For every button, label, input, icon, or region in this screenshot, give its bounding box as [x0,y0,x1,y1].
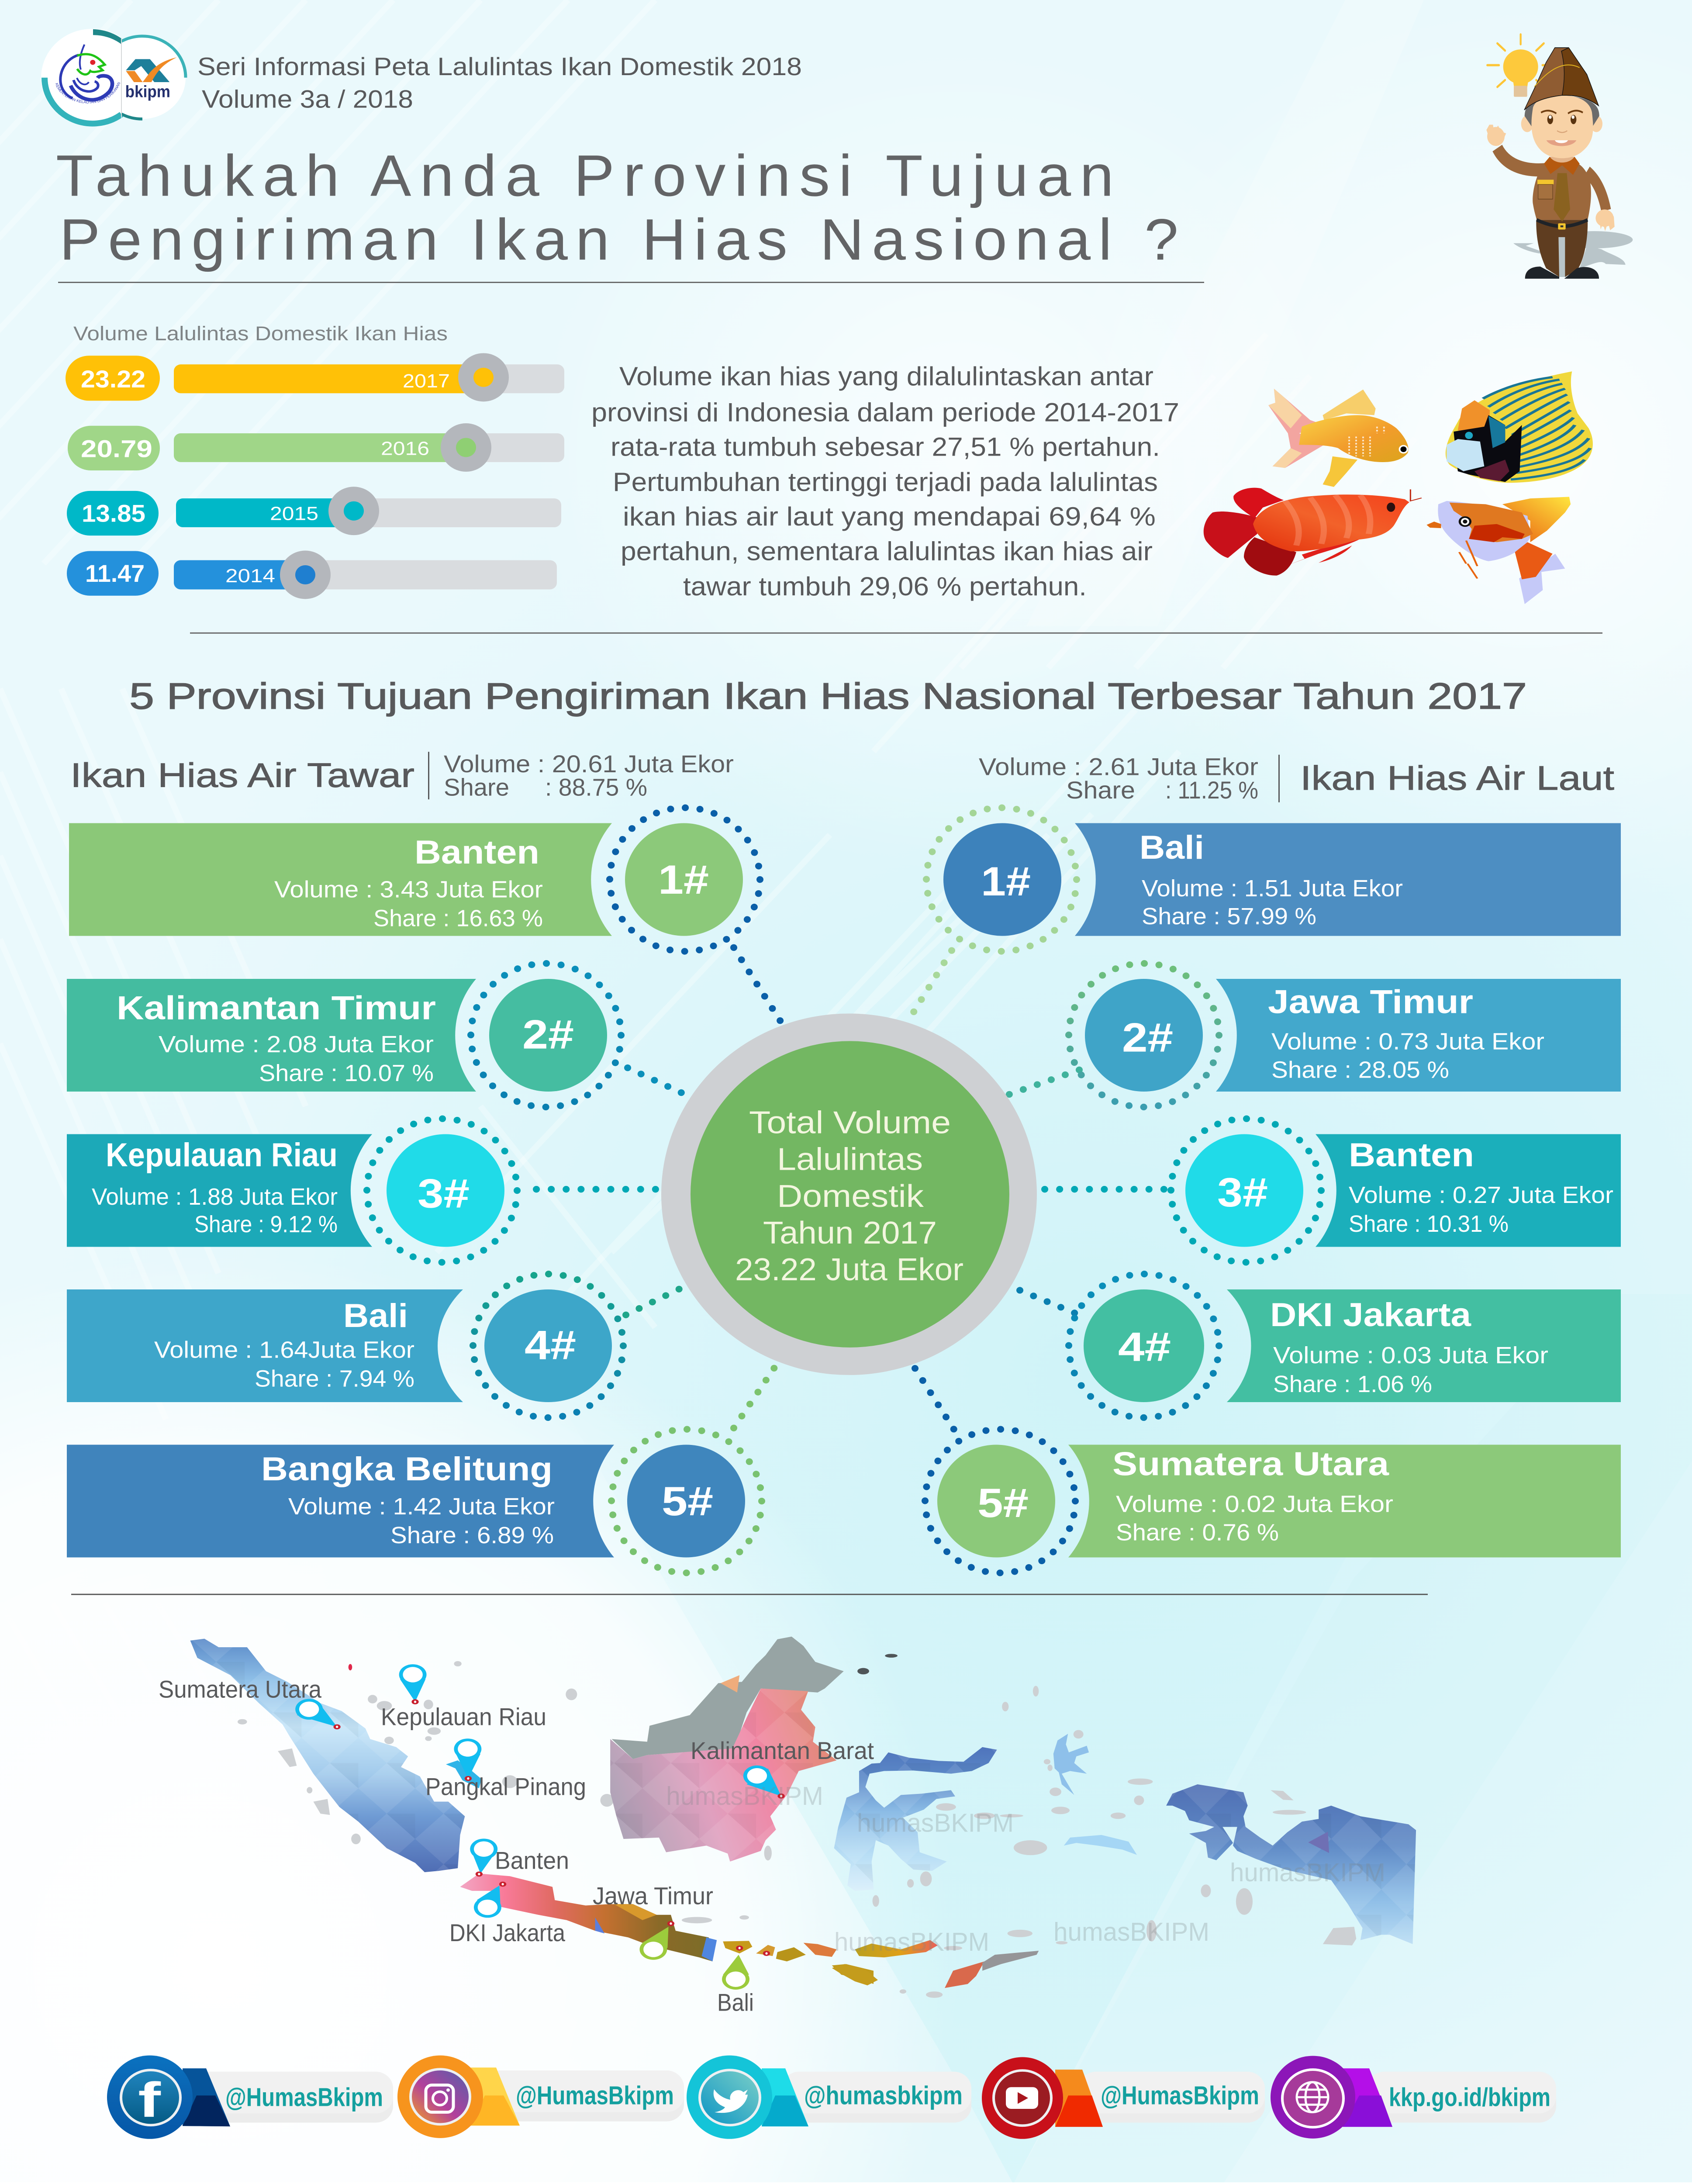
social: website: kkp.go.id/bkipm [1389,2083,1550,2111]
panel: right 4 DKI Jakarta: Share : 1.06 % [1273,1371,1432,1397]
panel: right 1 Bali: Share : 57.99 % [1142,903,1316,930]
marine summary [979,754,1614,804]
grey islands east [873,1686,1356,1998]
map labels: Sumatera Utara [159,1676,321,1703]
panel: right 1 Bali: Volume : 1.51 Juta Ekor [1142,875,1403,902]
Flores and Sumba [855,1940,938,1957]
Bali and Nusa Tenggara west [723,1941,874,1984]
map labels: Jawa Timur [593,1883,713,1910]
panel: right 2 Jawa Timur: Volume : 0.73 Juta Ekor [1271,1028,1544,1054]
panel: left 4 Bali: Bali [343,1297,408,1334]
map of Indonesia [159,1637,1416,2016]
freshwater summary: Share [444,774,509,801]
paragraph: pertahun, sementara lalulintas ikan hias air [621,537,1153,566]
paragraph: Pertumbuhan tertinggi terjadi pada lalulintas [613,467,1158,497]
header text: Seri Informasi Peta Lalulintas Ikan Domestik 2018 [197,53,802,81]
social: youtube [982,2057,1265,2139]
Papua [1166,1784,1416,1944]
bar chart: volume per year [66,353,564,599]
social: instagram: @HumasBkipm [516,2081,674,2110]
dotted connectors [536,947,1171,1431]
social: facebook [107,2056,393,2139]
logos: bkipm [125,83,170,101]
map pins [295,1664,784,1990]
watermarks: humasBKIPM [857,1808,1014,1837]
legs [1536,220,1588,277]
paragraph: Volume ikan hias yang dilalulintaskan antar [619,362,1153,391]
social: facebook: f [138,2073,161,2128]
freshwater summary [70,751,734,801]
social: youtube: @HumasBkipm [1101,2081,1259,2110]
bar 2015: 2015 [270,503,318,525]
map labels: Bali [717,1990,754,2016]
bulb [1487,35,1554,97]
center total circle: Tahun 2017 [763,1215,937,1251]
center total circle: Domestik [777,1178,924,1213]
hat [1524,48,1599,110]
marine summary: : 11.25 % [1165,777,1258,804]
map east: Sulawesi, Maluku, Papua [832,1654,1416,1998]
koi [1426,497,1571,604]
title [56,143,1178,273]
panel: right 2 Jawa Timur: Share : 28.05 % [1271,1057,1449,1083]
bar 2014 [67,551,557,599]
panel: left 4 Bali: Share : 7.94 % [255,1365,414,1392]
map labels: Pangkal Pinang [425,1773,586,1800]
header text: Volume 3a / 2018 [202,86,413,113]
panel: left 5 Bangka Belitung: Bangka Belitung [261,1450,552,1487]
panel: left 4 Bali [67,1274,623,1417]
Seram [1064,1835,1137,1855]
panel: right 1 Bali: 1# [981,859,1031,904]
panel: left 3 Kepulauan Riau: 3# [418,1171,470,1216]
logos: KEMENTERIAN KELAUTAN DAN PERIKANAN [55,82,121,104]
panel: left 5 Bangka Belitung: 5# [662,1479,713,1524]
bar 2015: 13.85 [82,501,145,527]
panel: left 1 Banten: Volume : 3.43 Juta Ekor [274,876,543,902]
panel: left 2 Kalimantan Timur: Share : 10.07 % [259,1060,434,1086]
social: twitter: @humasbkipm [804,2081,963,2110]
panel: left 5 Bangka Belitung: Share : 6.89 % [390,1522,554,1548]
arowana [1204,488,1422,576]
watermarks: humasBKIPM [1230,1858,1385,1887]
panel: left 4 Bali: 4# [525,1323,576,1368]
panel: left 3 Kepulauan Riau: Volume : 1.88 Juta Ekor [92,1183,338,1210]
bar 2017: 2017 [403,370,450,392]
paragraph [591,362,1179,601]
panel: right 2 Jawa Timur: 2# [1122,1015,1173,1061]
title: Pengiriman Ikan Hias Nasional ? [59,207,1178,273]
panel: right 5 Sumatera Utara [925,1429,1621,1573]
map labels: Kalimantan Barat [691,1738,874,1765]
panel: right 1 Bali [926,808,1621,951]
Halmahera [1053,1734,1089,1795]
panel: right 4 DKI Jakarta: 4# [1118,1324,1171,1370]
map west: Sumatra, Java, Kalimantan [190,1637,874,1990]
Sumatra [190,1639,465,1872]
watermarks: humasBKIPM [1053,1917,1209,1946]
bar 2017 [66,353,564,401]
bar 2016 [68,423,564,472]
panel: right 1 Bali: Bali [1140,828,1204,866]
panel: left 4 Bali: Volume : 1.64Juta Ekor [154,1337,414,1363]
paragraph: tawar tumbuh 29,06 % pertahun. [683,572,1087,601]
map labels: DKI Jakarta [449,1920,565,1947]
freshwater summary: Ikan Hias Air Tawar [70,756,414,794]
panel: right 3 Banten: Share : 10.31 % [1349,1210,1509,1237]
panel: right 4 DKI Jakarta: Volume : 0.03 Juta Ekor [1273,1342,1548,1368]
panel: right 3 Banten: 3# [1217,1170,1268,1215]
watermarks [666,1782,1385,1956]
marine summary: Ikan Hias Air Laut [1300,759,1614,797]
grey islands west [238,1661,772,1923]
paragraph: provinsi di Indonesia dalam periode 2014-2017 [591,398,1179,427]
panel: right 5 Sumatera Utara: Volume : 0.02 Juta Ekor [1116,1491,1393,1517]
panel: left 3 Kepulauan Riau: Share : 9.12 % [194,1211,338,1237]
paragraph: rata-rata tumbuh sebesar 27,51 % pertahun. [611,432,1160,462]
paragraph: ikan hias air laut yang mendapai 69,64 % [623,502,1156,532]
watermarks: humasBKIPM [666,1782,823,1811]
body [1533,164,1591,220]
freshwater summary: Volume : 20.61 Juta Ekor [444,751,734,778]
panel: left 2 Kalimantan Timur: Kalimantan Timur [117,989,436,1026]
Kalimantan north [611,1637,844,1759]
freshwater summary: : 88.75 % [545,774,647,801]
marine summary: Share [1066,777,1135,804]
panel: left 1 Banten: 1# [658,857,709,903]
map labels [159,1676,874,2016]
panel: left 3 Kepulauan Riau [67,1119,517,1262]
panel: left 5 Bangka Belitung [67,1429,762,1573]
character illustration [1486,35,1633,279]
panel: left 1 Banten: Share : 16.63 % [373,905,543,931]
panel: right 3 Banten: Volume : 0.27 Juta Ekor [1349,1182,1613,1208]
social: instagram [397,2056,684,2138]
panel: left 1 Banten [69,808,760,951]
panel: left 2 Kalimantan Timur: 2# [522,1012,574,1057]
panel: right 4 DKI Jakarta: DKI Jakarta [1270,1296,1471,1334]
Timor [945,1961,984,1988]
social: twitter [687,2056,971,2139]
panel: right 3 Banten: Banten [1349,1136,1474,1174]
panel: left 1 Banten: Banten [414,833,539,871]
fish illustrations [1204,371,1593,604]
panel: left 3 Kepulauan Riau: Kepulauan Riau [106,1136,338,1174]
goldfish [1268,389,1409,487]
volume chart label: Volume Lalulintas Domestik Ikan Hias [73,322,448,345]
bar 2014: 11.47 [85,560,145,587]
logos [41,29,186,127]
center total circle: 23.22 Juta Ekor [735,1252,963,1287]
bar 2016: 2016 [381,438,429,459]
Java [460,1873,712,1961]
social: website [1271,2056,1556,2139]
hands [1486,124,1615,231]
emperor angelfish [1446,371,1593,483]
social: facebook: @HumasBkipm [225,2083,383,2111]
bar 2014: 2014 [225,565,275,587]
bar 2016: 20.79 [81,436,152,463]
section heading: 5 Provinsi Tujuan Pengiriman Ikan Hias Nasional Terbesar Tahun 2017 [129,676,1527,717]
marine summary: Volume : 2.61 Juta Ekor [979,754,1258,781]
center total circle [661,1013,1037,1375]
panel: right 5 Sumatera Utara: 5# [977,1480,1029,1526]
panel: right 2 Jawa Timur: Jawa Timur [1268,983,1473,1020]
center total circle: Total Volume [749,1105,951,1140]
Kalimantan south [610,1689,836,1862]
map labels: Kepulauan Riau [381,1704,546,1731]
header text [197,53,802,113]
panel: right 5 Sumatera Utara: Sumatera Utara [1112,1445,1389,1482]
map labels: Banten [495,1848,569,1874]
panel: left 2 Kalimantan Timur: Volume : 2.08 Juta Ekor [159,1031,434,1057]
shadow [1513,231,1633,277]
panel: right 5 Sumatera Utara: Share : 0.76 % [1116,1519,1279,1545]
head [1550,157,1575,165]
panel: left 2 Kalimantan Timur [67,964,621,1107]
panel: right 2 Jawa Timur [1069,964,1621,1107]
panel: left 5 Bangka Belitung: Volume : 1.42 Juta Ekor [288,1493,555,1520]
bar 2015 [67,487,561,536]
center total circle: Lalulintas [777,1141,923,1177]
bar 2017: 23.22 [81,366,145,393]
Sulawesi [834,1747,997,1891]
panel: right 3 Banten [1171,1119,1621,1262]
watermarks: humasBKIPM [834,1927,989,1956]
panel: right 4 DKI Jakarta [1069,1274,1621,1417]
title: Tahukah Anda Provinsi Tujuan [56,143,1114,209]
